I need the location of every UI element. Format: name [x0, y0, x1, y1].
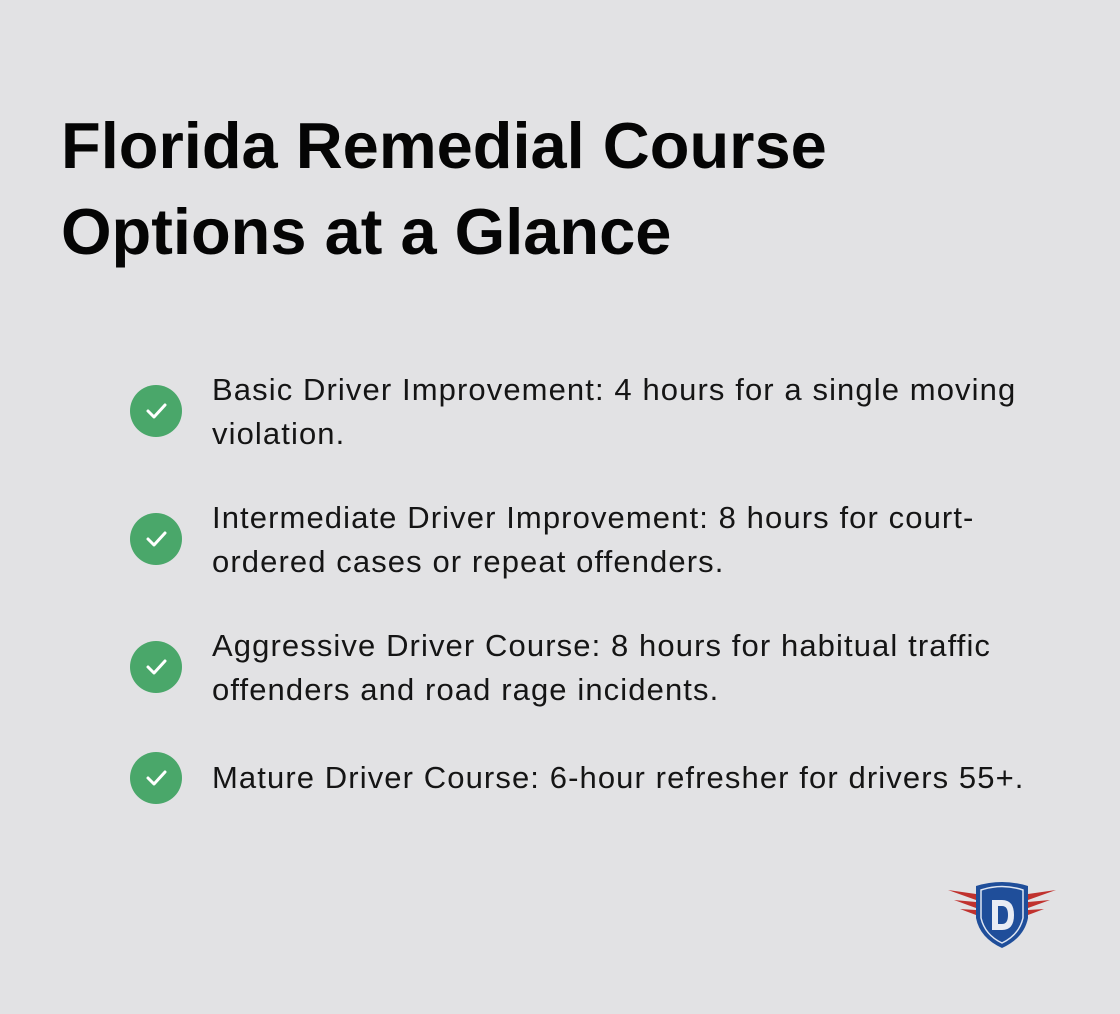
item: mature — [130, 752, 1025, 804]
text: Intermediate Driver Improvement: 8 hours for court- — [212, 500, 974, 535]
text: Aggressive Driver Course: 8 hours for habitual traffic — [212, 628, 991, 663]
text — [212, 500, 974, 579]
icon: check — [130, 752, 182, 804]
text — [212, 372, 1016, 451]
text: violation. — [212, 416, 345, 451]
logo — [948, 882, 1056, 948]
title: Florida Remedial Course — [61, 109, 827, 182]
icon: check — [130, 513, 182, 565]
item: aggressive — [130, 628, 991, 707]
item: intermediate — [130, 500, 974, 579]
text: Mature Driver Course: 6-hour refresher for drivers 55+. — [212, 760, 1025, 795]
text: Basic Driver Improvement: 4 hours for a single moving — [212, 372, 1016, 407]
text: ordered cases or repeat offenders. — [212, 544, 724, 579]
text: offenders and road rage incidents. — [212, 672, 719, 707]
title: Options at a Glance — [61, 195, 671, 268]
text — [212, 628, 991, 707]
icon: check — [130, 385, 182, 437]
item: basic — [130, 372, 1016, 451]
icon: check — [130, 641, 182, 693]
title — [61, 109, 827, 268]
